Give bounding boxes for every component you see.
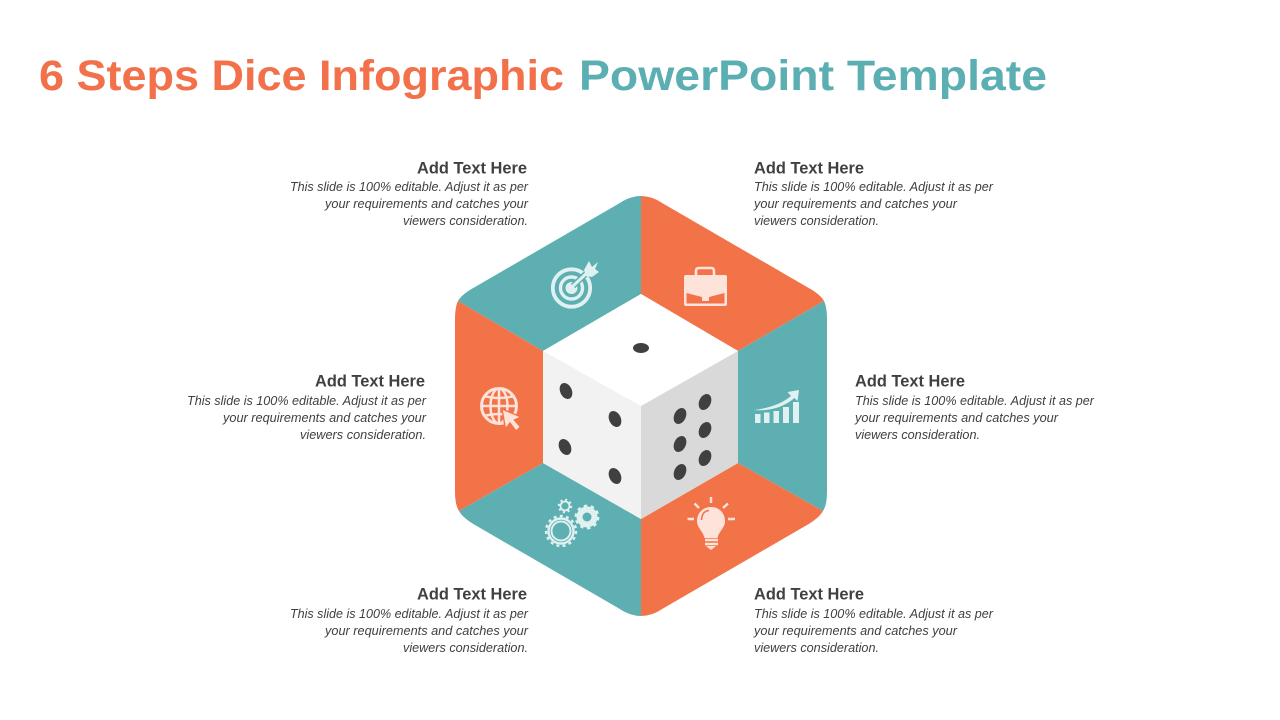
icon: globe with cursor [482,388,521,431]
body: top-right [753,179,994,228]
title [39,52,1047,100]
body: top-left: This slide is 100% editable. Adjust it as per [290,179,529,194]
text block: middle-right [854,372,1095,442]
body: bottom-left: This slide is 100% editable. Adjust it as per [290,606,529,621]
text block: bottom-right [753,584,994,655]
hexagon dice diagram [455,196,827,616]
text block: top-left [290,158,529,228]
panel: bottom-right orange [641,463,823,616]
text block: bottom-left [290,584,529,655]
body: top-left: your requirements and catches your [324,196,529,211]
icon: light bulb [688,497,735,550]
body: bottom-left [290,606,529,655]
panel: left orange [455,301,543,511]
body: middle-right: This slide is 100% editable. Adjust it as per [855,393,1095,408]
pips: right face six [671,392,714,482]
body: bottom-right: viewers consideration. [754,640,879,655]
panel: top-right orange [641,196,824,351]
title: 6 Steps Dice Infographic [39,52,564,100]
title: PowerPoint Template [579,52,1047,100]
body: middle-left: This slide is 100% editable. Adjust it as per [187,393,427,408]
heading: bottom-left: Add Text Here [417,584,527,604]
panel: right teal [738,301,827,511]
body: top-left: viewers consideration. [403,213,528,228]
body: middle-right: your requirements and catches your [854,410,1059,425]
panel: bottom-left teal [459,463,641,616]
dice right face [641,351,738,519]
body: bottom-right: This slide is 100% editable. Adjust it as per [754,606,994,621]
body: top-right: viewers consideration. [754,213,879,228]
body: middle-left: your requirements and catches your [222,410,427,425]
body: top-left [290,179,529,228]
body: middle-left [187,393,427,442]
dice cube [543,294,738,519]
body: top-right: your requirements and catches your [753,196,958,211]
text block: middle-left [187,372,427,442]
text block: top-right [753,158,994,228]
body: middle-right [854,393,1095,442]
heading: top-left: Add Text Here [417,158,527,178]
body: top-right: This slide is 100% editable. Adjust it as per [754,179,994,194]
heading: middle-left: Add Text Here [315,372,425,390]
body: bottom-right: your requirements and catches your [753,623,958,638]
heading: bottom-right: Add Text Here [754,584,864,604]
body: bottom-left: your requirements and catches your [324,623,529,638]
heading: middle-right: Add Text Here [855,372,965,390]
body: middle-left: viewers consideration. [300,427,426,442]
body: bottom-left: viewers consideration. [403,640,528,655]
icon: briefcase [684,268,727,306]
icon: gears [546,500,598,546]
icon: growth chart [754,390,799,423]
dice top face [543,294,738,406]
body: middle-right: viewers consideration. [855,427,980,442]
heading: top-right: Add Text Here [754,158,864,178]
pips: left face four [556,381,624,486]
dice left face [543,351,641,519]
panel: top-left teal [458,196,641,351]
icon: target [553,261,599,307]
body: bottom-right [753,606,994,655]
pip: top face one [633,343,649,353]
